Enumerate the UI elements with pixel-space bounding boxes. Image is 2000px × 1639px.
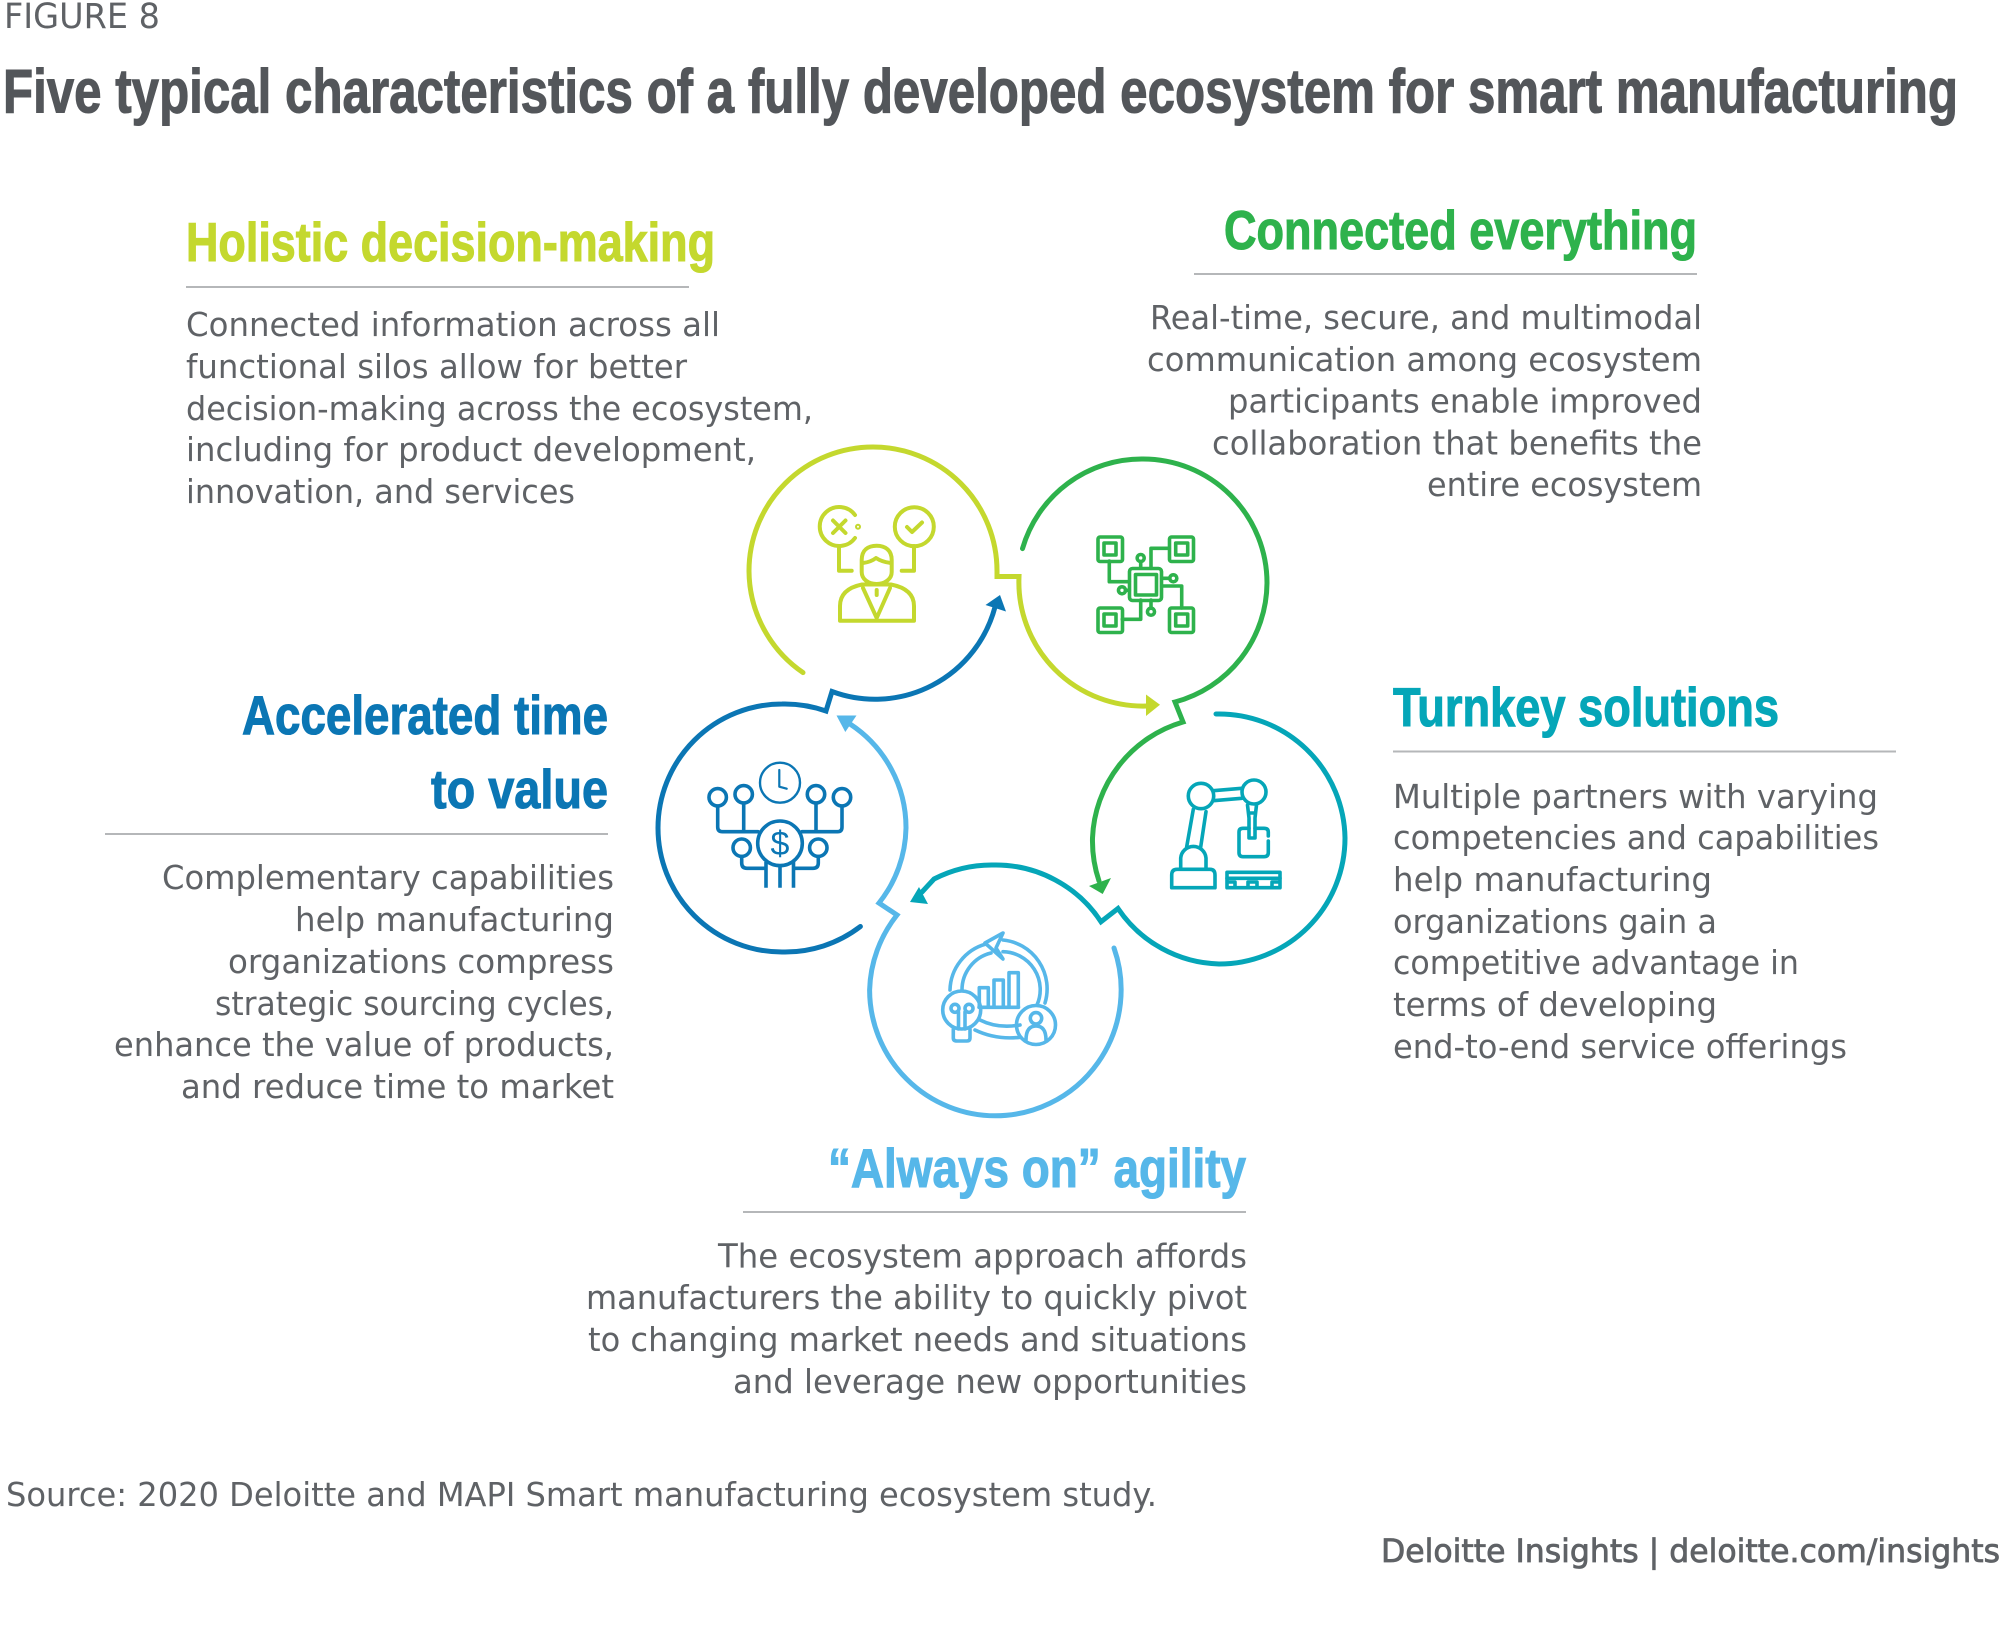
text: turnkey solutions description: Multiple partners with varying [1393, 777, 1878, 816]
text: connected everything description: Real-time, secure, and multimodal [1150, 298, 1702, 337]
text: connected everything description: collaboration that benefits the [1212, 424, 1702, 462]
text: holistic decision-making description: decision-making across the ecosystem, [186, 389, 813, 428]
text: connected everything description: communication among ecosystem [1147, 340, 1702, 379]
icon: agility cycle [943, 933, 1056, 1044]
heading: accelerated time to value [242, 684, 608, 820]
arrow: light blue ring [836, 716, 1121, 1116]
text: always on agility description [586, 1236, 1247, 1401]
text: accelerated time to value description: and reduce time to market [181, 1067, 614, 1106]
icon: time and money network [709, 763, 851, 888]
text: connected everything description: entire ecosystem [1427, 465, 1702, 504]
text: accelerated time to value description: enhance the value of products, [114, 1025, 614, 1064]
text: accelerated time to value description: organizations compress [228, 942, 614, 981]
text: holistic decision-making description: including for product development, [186, 430, 756, 469]
heading: accelerated time to value: to value [431, 758, 608, 820]
arrow: green ring [1022, 459, 1267, 894]
text: turnkey solutions description: competitive advantage in [1393, 943, 1799, 982]
text: accelerated time to value description: Complementary capabilities [162, 858, 614, 897]
panel: always on agility [586, 1137, 1247, 1401]
text: turnkey solutions description: competencies and capabilities [1393, 818, 1879, 857]
text: turnkey solutions description: help manufacturing [1393, 860, 1712, 899]
text: accelerated time to value description: help manufacturing [295, 900, 614, 939]
heading: holistic decision-making: Holistic decision-making [186, 211, 715, 273]
text: accelerated time to value description [114, 858, 614, 1106]
text: always on agility description: to changing market needs and situations [588, 1320, 1247, 1359]
panel: connected everything [1147, 199, 1702, 504]
text: holistic decision-making description: Connected information across all [186, 305, 720, 344]
credit: Deloitte Insights | deloitte.com/insights [1381, 1532, 2000, 1570]
text: connected everything description: participants enable improved [1228, 382, 1702, 420]
icon: connected chip network [1098, 537, 1194, 632]
heading: always on agility: “Always on” agility [828, 1137, 1246, 1199]
text: holistic decision-making description [186, 305, 813, 511]
text: always on agility description: manufacturers the ability to quickly pivot [586, 1278, 1247, 1317]
cycle diagram [658, 447, 1345, 1116]
panel: turnkey solutions [1393, 676, 1896, 1066]
text: turnkey solutions description: end-to-end service offerings [1393, 1027, 1847, 1066]
arrow: yellow ring [749, 447, 1160, 716]
text: accelerated time to value description: strategic sourcing cycles, [215, 984, 614, 1023]
text: turnkey solutions description: terms of developing [1393, 985, 1717, 1024]
heading: turnkey solutions: Turnkey solutions [1393, 676, 1779, 738]
heading: connected everything: Connected everything [1224, 199, 1697, 261]
arrow: teal ring [910, 714, 1345, 964]
text: always on agility description: The ecosystem approach affords [717, 1236, 1247, 1276]
heading: accelerated time to value: Accelerated time [242, 684, 608, 746]
text: connected everything description [1147, 298, 1702, 504]
icon glyph: dollar sign: $ [771, 825, 790, 863]
icon: robot arm with pallet [1172, 780, 1280, 888]
arrow: dark blue ring [658, 595, 1006, 952]
icon: decision maker [820, 507, 934, 621]
text: always on agility description: and leverage new opportunities [733, 1362, 1247, 1401]
text: holistic decision-making description: innovation, and services [186, 472, 575, 511]
text: holistic decision-making description: functional silos allow for better [186, 347, 687, 386]
panel: accelerated time to value [105, 684, 614, 1106]
source note: Source: 2020 Deloitte and MAPI Smart manufacturing ecosystem study. [6, 1475, 1157, 1514]
panel: holistic decision-making [186, 211, 813, 511]
text: turnkey solutions description: organizations gain a [1393, 902, 1717, 941]
text: turnkey solutions description [1393, 777, 1879, 1066]
